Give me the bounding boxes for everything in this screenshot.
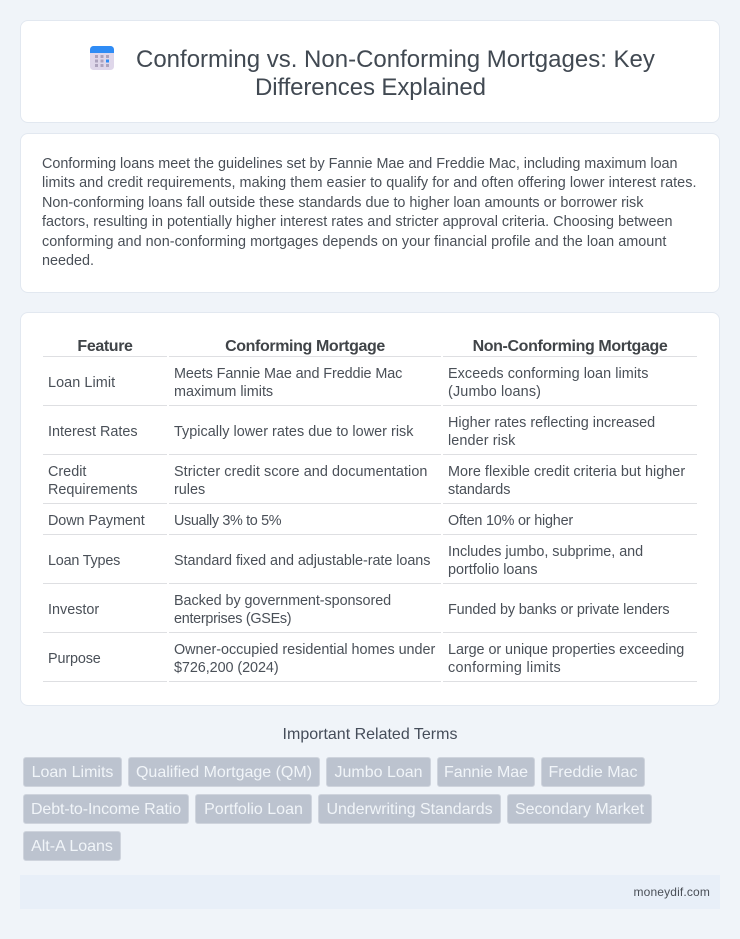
text: Freddie Mac: [549, 764, 637, 781]
text: More flexible credit criteria but higher: [448, 464, 685, 480]
text: (Jumbo loans): [448, 384, 541, 400]
text: Investor: [48, 602, 99, 618]
text: Conforming loans meet the guidelines set by Fannie Mae and Freddie Mac, including maximum loan: [42, 156, 678, 172]
panel: comparison table: [20, 312, 720, 706]
text: lender risk: [448, 433, 515, 449]
text: maximum limits: [174, 384, 273, 400]
text: factors, resulting in potentially higher interest rates and stricter approval criteria. Choosing between: [42, 214, 673, 230]
text: needed.: [42, 253, 94, 269]
text: Exceeds conforming loan limits: [448, 366, 648, 382]
text: Feature: [77, 338, 133, 355]
text: Requirements: [48, 482, 138, 498]
text block: introduction paragraph: [42, 156, 697, 269]
text: Typically lower rates due to lower risk: [174, 424, 414, 440]
text: Non-Conforming Mortgage: [473, 338, 667, 355]
panel: header: [20, 20, 720, 123]
text: Conforming Mortgage: [225, 338, 385, 355]
text: Jumbo Loan: [334, 764, 423, 781]
footer source text: moneydif.com: [634, 885, 710, 899]
table: comparison of mortgages: [43, 338, 697, 682]
text: Non-conforming loans fall outside these standards due to higher loan amounts or borrower risk: [42, 195, 643, 211]
text: Interest Rates: [48, 424, 138, 440]
text: Qualified Mortgage (QM): [136, 764, 312, 781]
text: Alt-A Loans: [31, 838, 113, 855]
text: enterprises (GSEs): [174, 611, 291, 627]
text: Credit: [48, 464, 86, 480]
text: $726,200 (2024): [174, 660, 279, 676]
text: Backed by government-sponsored: [174, 593, 391, 609]
text: Secondary Market: [515, 801, 644, 818]
text: Higher rates reflecting increased: [448, 415, 655, 431]
text: Large or unique properties exceeding: [448, 642, 684, 658]
text: portfolio loans: [448, 562, 538, 578]
icon: calendar: [90, 46, 114, 70]
text: Debt-to-Income Ratio: [31, 801, 181, 818]
text: Portfolio Loan: [204, 801, 303, 818]
text: Owner-occupied residential homes under: [174, 642, 435, 658]
panel: introduction: [20, 133, 720, 293]
text: Includes jumbo, subprime, and: [448, 544, 643, 560]
text: conforming limits: [448, 660, 561, 676]
text: conforming and non-conforming mortgages depends on your financial profile and the loan amount: [42, 234, 666, 250]
text: Standard fixed and adjustable-rate loans: [174, 553, 430, 569]
footer: [20, 875, 720, 909]
heading: important related terms: Important Related Terms: [283, 726, 457, 743]
text: Loan Limit: [48, 375, 115, 391]
text: Loan Types: [48, 553, 120, 569]
text: Purpose: [48, 651, 101, 667]
text: limits and credit requirements, making them easier to qualify for and often offering lower interest rates.: [42, 175, 697, 191]
text: rules: [174, 482, 205, 498]
text: Stricter credit score and documentation: [174, 464, 427, 480]
text: Meets Fannie Mae and Freddie Mac: [174, 366, 402, 382]
text: Underwriting Standards: [326, 801, 493, 818]
text: Funded by banks or private lenders: [448, 602, 670, 618]
tags: related terms: [23, 757, 652, 861]
text: standards: [448, 482, 510, 498]
title: [136, 46, 655, 101]
text: Differences Explained: [255, 74, 486, 101]
text: Fannie Mae: [444, 764, 528, 781]
text: Conforming vs. Non-Conforming Mortgages: Key: [136, 46, 655, 73]
text: Often 10% or higher: [448, 513, 573, 529]
text: Down Payment: [48, 513, 145, 529]
text: Loan Limits: [32, 764, 113, 781]
text: Usually 3% to 5%: [174, 513, 281, 529]
